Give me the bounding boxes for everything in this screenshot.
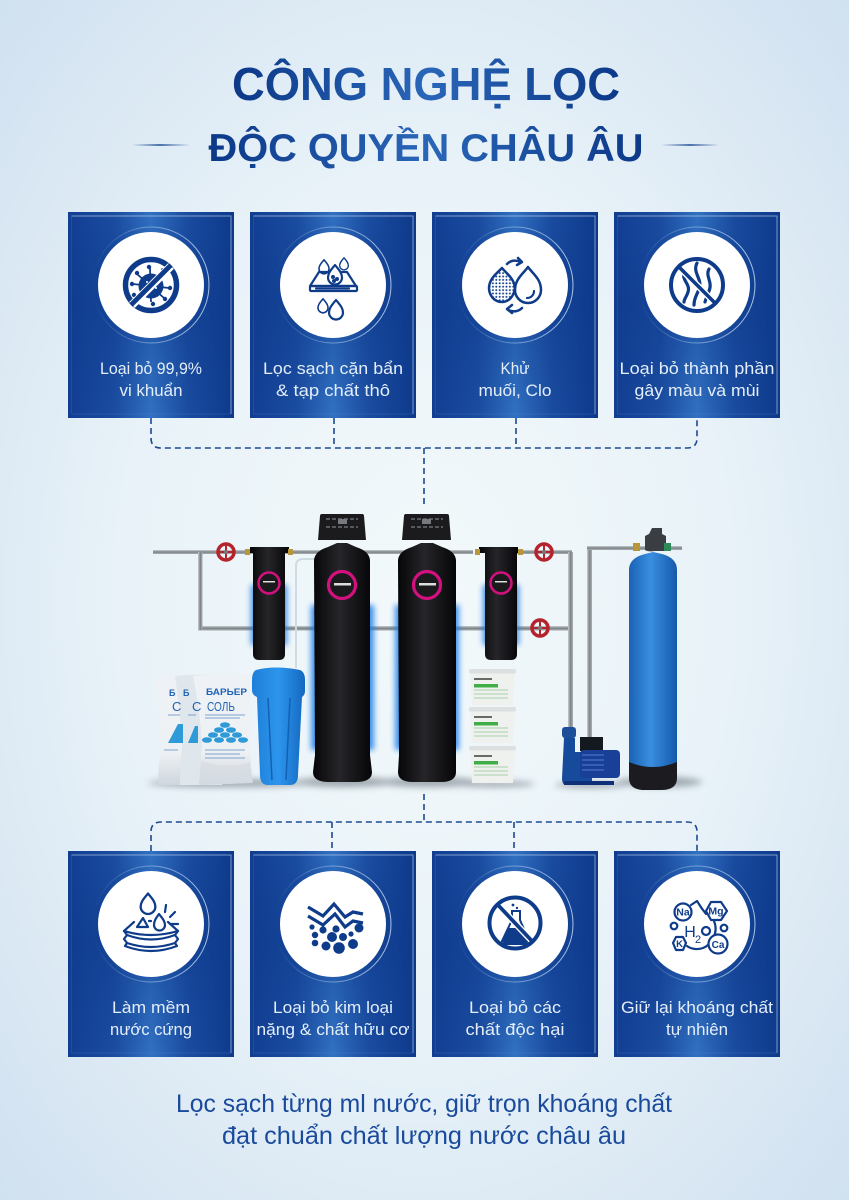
caption <box>478 359 552 400</box>
caption: Loại bỏ các <box>469 998 562 1017</box>
caption <box>621 998 773 1039</box>
caption: Loại bỏ kim loại <box>273 998 393 1017</box>
panel: top card 2 <box>250 212 416 418</box>
floor shadows <box>148 777 702 788</box>
caption: Lọc sạch cặn bẩn <box>263 359 403 378</box>
caption: nước cứng <box>110 1020 192 1039</box>
icon: natural minerals: K <box>676 939 683 950</box>
caption <box>100 359 202 400</box>
media buckets <box>469 669 516 783</box>
icon: no bacteria <box>126 260 176 310</box>
icon: natural minerals: 2 <box>695 934 701 946</box>
caption: nặng & chất hữu cơ <box>256 1020 410 1039</box>
cartridge filters <box>245 547 523 660</box>
caption: Làm mềm <box>112 998 190 1017</box>
pump <box>562 727 620 785</box>
closing tagline <box>176 1090 672 1150</box>
title: CÔNG NGHỆ LỌC <box>232 58 620 110</box>
caption: Giữ lại khoáng chất <box>621 998 773 1017</box>
salt bags: БАРЬЕР <box>206 687 248 698</box>
caption <box>256 998 410 1039</box>
pressure tank <box>629 528 677 790</box>
water treatment system illustration <box>148 514 702 790</box>
icon: softening water <box>124 894 178 951</box>
caption: tự nhiên <box>666 1020 728 1039</box>
salt bags: Б <box>169 688 176 698</box>
icon: natural minerals <box>671 901 728 954</box>
icon: no colour and odour <box>671 259 723 311</box>
salt bags: С <box>192 699 201 714</box>
title <box>132 58 719 170</box>
panel: top card 4 <box>614 212 780 418</box>
title: ĐỘC QUYỀN CHÂU ÂU <box>208 125 644 170</box>
salt bags: Б <box>183 688 190 698</box>
closing tagline: đạt chuẩn chất lượng nước châu âu <box>222 1122 626 1150</box>
salt bags <box>155 674 253 785</box>
icon: heavy metals and organics <box>308 904 364 954</box>
connector: system to bottom cards <box>151 794 697 851</box>
icon: salt and chlorine drops <box>489 258 541 313</box>
caption: & tạp chất thô <box>276 381 390 400</box>
caption <box>263 359 403 400</box>
caption <box>620 359 774 400</box>
connector: top cards to system <box>151 418 697 506</box>
panel: bottom card 3 <box>432 851 598 1057</box>
caption: vi khuẩn <box>120 381 182 400</box>
caption <box>110 998 192 1039</box>
panel: top card 1 <box>68 212 234 418</box>
caption: muối, Clo <box>478 381 552 400</box>
caption: gây màu và mùi <box>634 381 760 400</box>
valves <box>218 544 552 636</box>
icon: no toxic chemicals <box>490 898 540 948</box>
main tanks <box>313 514 456 782</box>
blue glow <box>251 585 519 750</box>
caption: chất độc hại <box>466 1020 564 1039</box>
panel: bottom card 1 <box>68 851 234 1057</box>
caption: Khử <box>500 359 530 378</box>
icon: filter sediment <box>310 258 357 320</box>
icon: natural minerals: Mg <box>708 906 724 918</box>
panel: bottom card 4 <box>614 851 780 1057</box>
pipes <box>153 546 682 737</box>
panel: top card 3 <box>432 212 598 418</box>
icon: natural minerals: Ca <box>712 940 725 951</box>
icon: natural minerals: H <box>684 924 696 941</box>
caption: Loại bỏ thành phần <box>620 359 774 378</box>
icon: natural minerals: Na <box>676 906 690 918</box>
closing tagline: Lọc sạch từng ml nước, giữ trọn khoáng chất <box>176 1090 672 1118</box>
softener tank <box>252 668 305 785</box>
salt bags: СОЛЬ <box>207 699 235 714</box>
caption: Loại bỏ 99,9% <box>100 359 202 378</box>
caption <box>466 998 564 1039</box>
panel: bottom card 2 <box>250 851 416 1057</box>
salt bags: С <box>172 699 181 714</box>
